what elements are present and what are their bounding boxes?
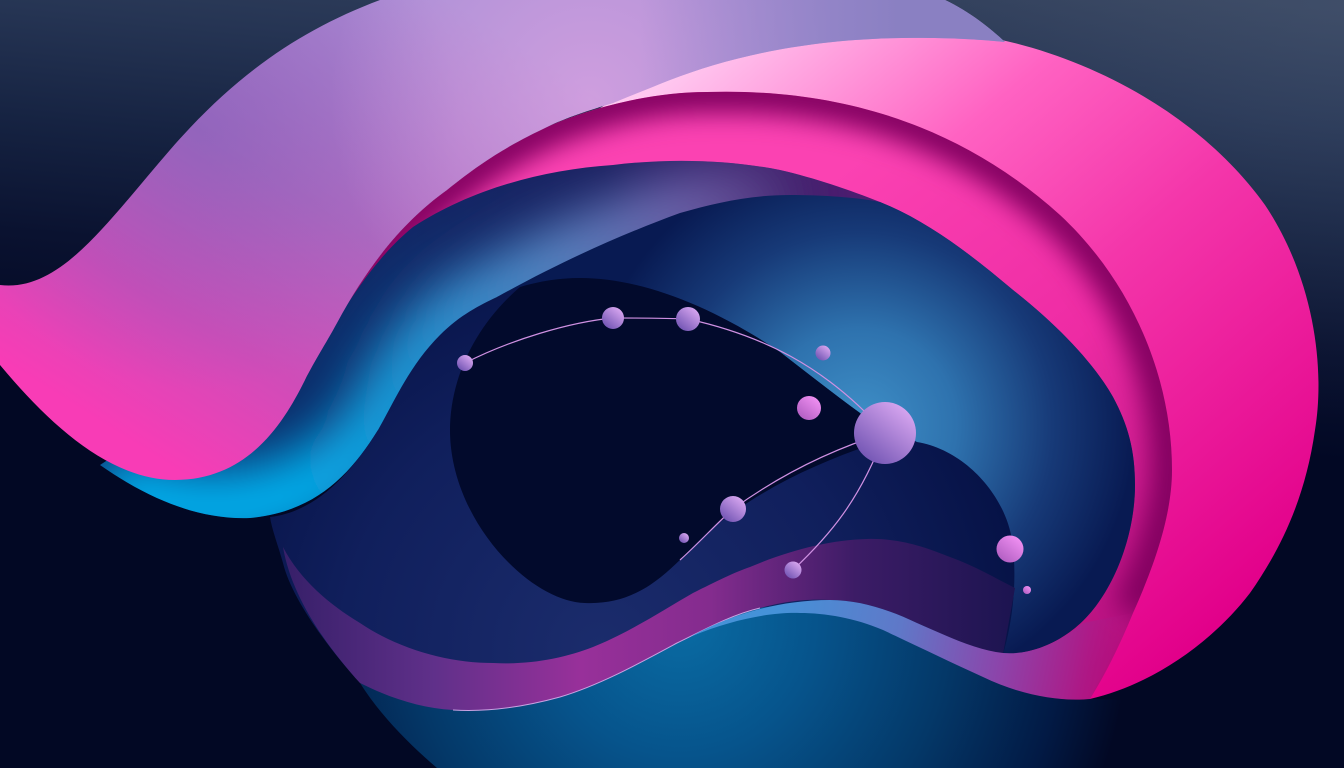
purple lower ribbon xyxy=(283,539,1015,710)
node 2 xyxy=(602,307,624,329)
node 6 xyxy=(720,496,746,522)
lavender highlight xyxy=(382,0,749,210)
lavender to pink wave xyxy=(0,0,1010,490)
plum and cyan wave xyxy=(100,161,1135,700)
network nodes xyxy=(457,307,1031,594)
node 4 xyxy=(816,346,830,360)
magenta fold shadow xyxy=(337,92,1172,613)
hot pink ribbon xyxy=(600,29,1318,699)
node 8 xyxy=(784,562,802,578)
hub node xyxy=(854,402,916,464)
magenta inner fold xyxy=(347,92,1172,700)
cyan inner highlight xyxy=(100,195,790,509)
node 10 xyxy=(1023,586,1031,594)
node 3 xyxy=(676,307,700,331)
node 1 xyxy=(457,355,473,371)
dark central blob xyxy=(450,278,870,603)
blue ribbon edge xyxy=(690,600,1133,700)
lavender right shade xyxy=(678,0,1005,76)
lavender left shade xyxy=(41,15,386,346)
node 9 xyxy=(996,536,1024,562)
network lines xyxy=(465,318,885,570)
node 7 xyxy=(679,533,689,543)
thin light edge of ribbon xyxy=(453,608,760,710)
bottom teal blob xyxy=(360,606,1130,768)
navy body xyxy=(270,278,1014,683)
blue glow chamber xyxy=(497,195,1135,654)
node 5 xyxy=(797,396,821,420)
